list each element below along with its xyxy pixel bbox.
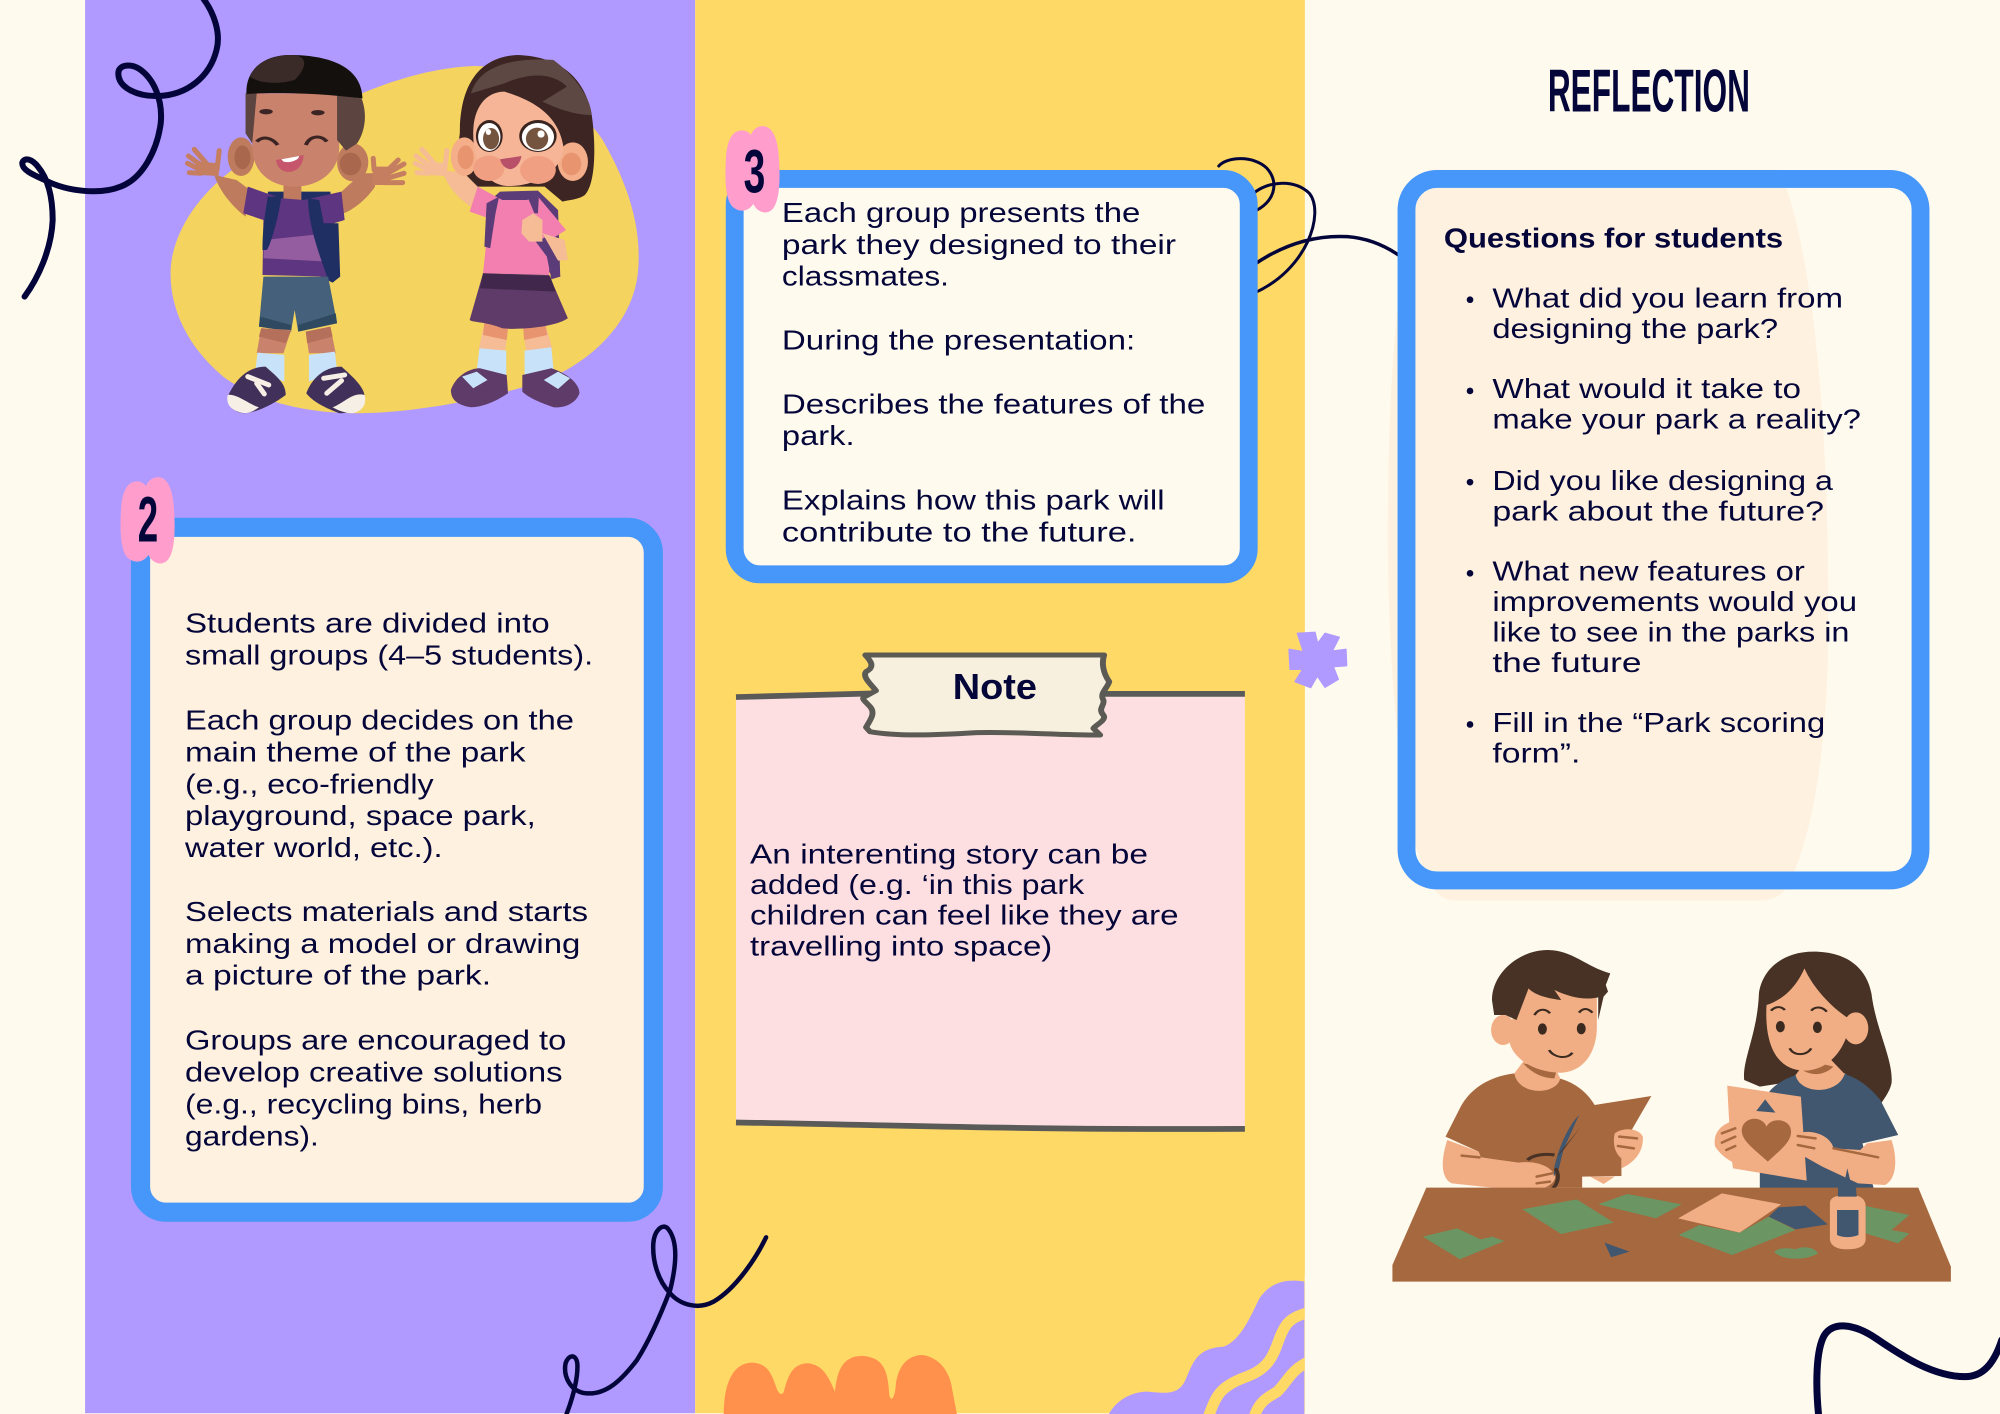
text: step 3 instructions: Each group presents the — [782, 197, 1140, 228]
bullet list: questions: What did you learn from — [1492, 282, 1843, 313]
card: step 3 — [725, 126, 1249, 574]
text: note body: children can feel like they are — [750, 900, 1179, 931]
badge: step 2 number: 2 — [138, 484, 158, 556]
text: step 2 instructions: gardens). — [185, 1120, 319, 1151]
text: step 3 instructions: Describes the features of the — [782, 388, 1205, 419]
text: step 2 instructions: Each group decides on the — [185, 705, 574, 736]
bullet list: questions: like to see in the parks in — [1492, 617, 1849, 648]
text: step 2 instructions: main theme of the park — [185, 736, 527, 767]
table with paper cut-outs and glue — [1392, 1168, 1951, 1282]
note heading tape — [863, 655, 1109, 735]
bullet list: questions: Fill in the “Park scoring — [1492, 707, 1825, 738]
bullet list: questions — [1467, 282, 1861, 769]
bullet list: questions: Did you like designing a — [1492, 465, 1833, 496]
decorative purple wave — [1109, 1281, 1305, 1414]
text: step 2 instructions: making a model or drawing — [185, 928, 580, 959]
text: step 3 instructions: contribute to the future. — [782, 516, 1136, 547]
decorative squiggles behind step 3 card — [1219, 159, 1403, 293]
figure: boy with scissors — [1443, 950, 1651, 1192]
bullet list: questions: What new features or — [1492, 555, 1805, 586]
bullet list: questions: make your park a reality? — [1492, 404, 1861, 435]
card: note — [736, 655, 1245, 1129]
decorative squiggle: top left — [22, 0, 218, 297]
text: step 3 instructions: During the presentation: — [782, 324, 1135, 355]
note heading tape: Note — [953, 667, 1037, 707]
text: step 2 instructions: (e.g., recycling bins, herb — [185, 1089, 542, 1120]
illustration: two school children on a yellow blob — [171, 55, 639, 413]
card: questions for students — [1388, 170, 1921, 901]
title: reflection: REFLECTION — [1548, 58, 1750, 125]
text: note body: An interenting story can be — [750, 839, 1148, 870]
text: step 2 instructions: playground, space park, — [185, 800, 536, 831]
text: step 2 instructions: Groups are encouraged to — [185, 1025, 566, 1056]
decorative squiggle: bottom right — [1817, 1326, 2000, 1414]
bullet list: questions: form”. — [1492, 738, 1580, 769]
text: step 3 instructions: park they designed to their — [782, 229, 1176, 260]
figure: boy — [188, 55, 404, 413]
text: note body: travelling into space) — [750, 930, 1052, 961]
badge: step 2 number — [121, 477, 175, 564]
text: step 2 instructions: Selects materials and starts — [185, 896, 588, 927]
text: note body — [750, 839, 1179, 961]
text: step 3 instructions — [782, 197, 1205, 547]
text: step 3 instructions: classmates. — [782, 261, 949, 292]
text: step 3 instructions: park. — [782, 420, 855, 451]
bullet list: questions: What would it take to — [1492, 373, 1801, 404]
text: step 2 instructions: (e.g., eco-friendly — [185, 768, 434, 799]
card: step 2 — [121, 477, 653, 1212]
text: step 2 instructions: a picture of the park. — [185, 960, 491, 991]
text: step 2 instructions — [184, 608, 593, 1151]
panel: purple column — [85, 0, 695, 1413]
bullet list: questions: the future — [1492, 647, 1642, 678]
decorative squiggle: crossing purple and yellow columns — [565, 1227, 766, 1414]
text: step 2 instructions: develop creative solutions — [185, 1057, 563, 1088]
bullet list: questions: park about the future? — [1492, 495, 1824, 526]
bullet list: questions: improvements would you — [1492, 586, 1857, 617]
text: step 3 instructions: Explains how this park will — [782, 485, 1165, 516]
icon: purple asterisk — [1289, 632, 1347, 688]
text: step 2 instructions: water world, etc.). — [184, 832, 443, 863]
text: step 2 instructions: small groups (4–5 students). — [185, 640, 593, 671]
decorative orange scalloped shape — [724, 1355, 957, 1414]
badge: step 3 number: 3 — [744, 138, 765, 206]
heading: questions for students: Questions for students — [1444, 222, 1783, 253]
figure: girl — [415, 55, 594, 407]
text: step 2 instructions: Students are divided into — [185, 608, 550, 639]
bullet list: questions: designing the park? — [1492, 313, 1778, 344]
panel: yellow column — [695, 0, 1305, 1413]
text: note body: added (e.g. ‘in this park — [750, 869, 1085, 900]
badge: step 3 number — [725, 126, 780, 212]
illustration: two children making paper crafts at a table — [1392, 950, 1951, 1282]
figure: girl with paper heart — [1715, 952, 1898, 1188]
